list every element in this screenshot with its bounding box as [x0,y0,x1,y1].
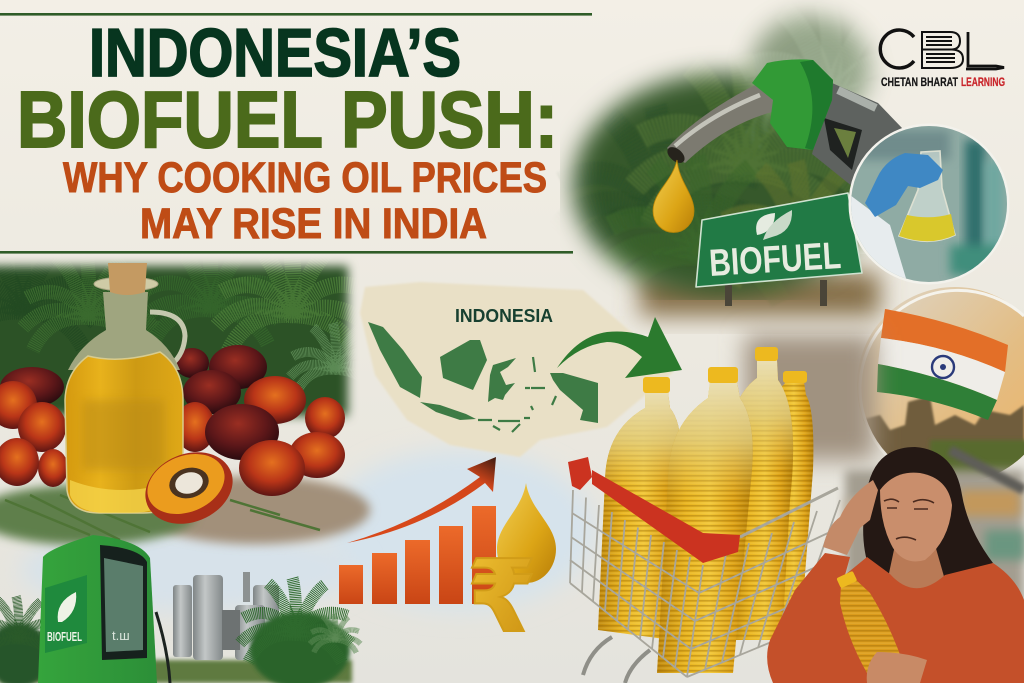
nozzle green handle [752,59,833,150]
subheading: May rise in India: MAY RISE IN INDIA [140,200,487,248]
flag [877,309,1008,420]
right-side market backdrop [745,335,1024,620]
bottle rim [94,277,158,291]
arrow: trend [347,457,496,543]
logo letter C [880,30,914,68]
icon: glass oil bottle [65,263,185,513]
held bottle [836,571,903,673]
oil body [65,352,183,513]
logo letter B [922,32,963,68]
icon: oil drop [497,483,556,583]
heading: Indonesia's: INDONESIA’S [89,15,461,91]
label: Indonesia: INDONESIA [455,306,553,326]
cork [108,263,147,295]
logo wordmark: CHETAN BHARAT [881,75,958,89]
neck [888,545,945,595]
map of Indonesia [360,282,673,457]
nozzle rear body [812,83,902,187]
logo wordmark accent: LEARNING [961,75,1005,89]
heading: Biofuel Push: BIOFUEL PUSH: [17,75,558,164]
city skyline [866,398,1024,471]
torso [767,553,1024,683]
fruit ground [140,476,370,544]
bottle: back right [770,371,813,640]
pale blue haze [20,450,595,612]
fuel pump: t.ш [112,628,130,643]
icon: leaf [756,210,792,240]
palm trees [0,577,360,683]
shopping cart with oil bottles [568,347,840,683]
hair [863,447,993,585]
icon: rupee symbol: ₹ [467,538,537,655]
biofuel road sign: BIOFUEL [708,235,842,285]
raised hand [823,480,878,555]
top rule [0,13,592,16]
cart wire basket [570,488,840,683]
refinery tanks [173,572,279,660]
icon: gloved hand [865,153,943,217]
circle border [860,290,1024,456]
bottle: front centre [657,367,753,673]
fuel pump: BIOFUEL [47,629,82,644]
bottle handle [150,312,185,364]
bottle: back centre [730,347,793,640]
panel: Indian flag inset [857,287,1024,490]
icon: flask [899,151,955,241]
panel: palm backdrop top right [555,0,927,316]
cut palm fruit [135,440,243,536]
lower rule [0,251,573,254]
panel: laboratory flask inset [850,125,1010,285]
fuel pump [38,535,157,683]
icon: oil drop from nozzle [653,160,694,232]
cart red rim [568,457,740,563]
biofuel pump and refinery strip [0,535,360,683]
chart: rising price bars [339,457,496,604]
bottle glass neck [68,292,180,370]
woman holding oil bottle [767,447,1024,683]
title [17,15,558,248]
lower hand [867,652,927,683]
logo: CBL [880,30,1005,89]
icon: fuel nozzle [664,59,902,187]
bottles [598,347,813,673]
palm fruits [0,345,345,496]
facial features [884,499,934,540]
nozzle spout [667,84,773,163]
pump cable [156,612,170,683]
arrow: green curved export arrow [557,317,682,378]
subheading: Why cooking oil prices: WHY COOKING OIL PRICES [63,154,547,202]
biofuel road sign [696,193,862,306]
panel: palm plantation left [0,236,381,545]
bottle: left [598,377,681,640]
face [880,473,952,562]
logo letter L [966,32,1004,69]
